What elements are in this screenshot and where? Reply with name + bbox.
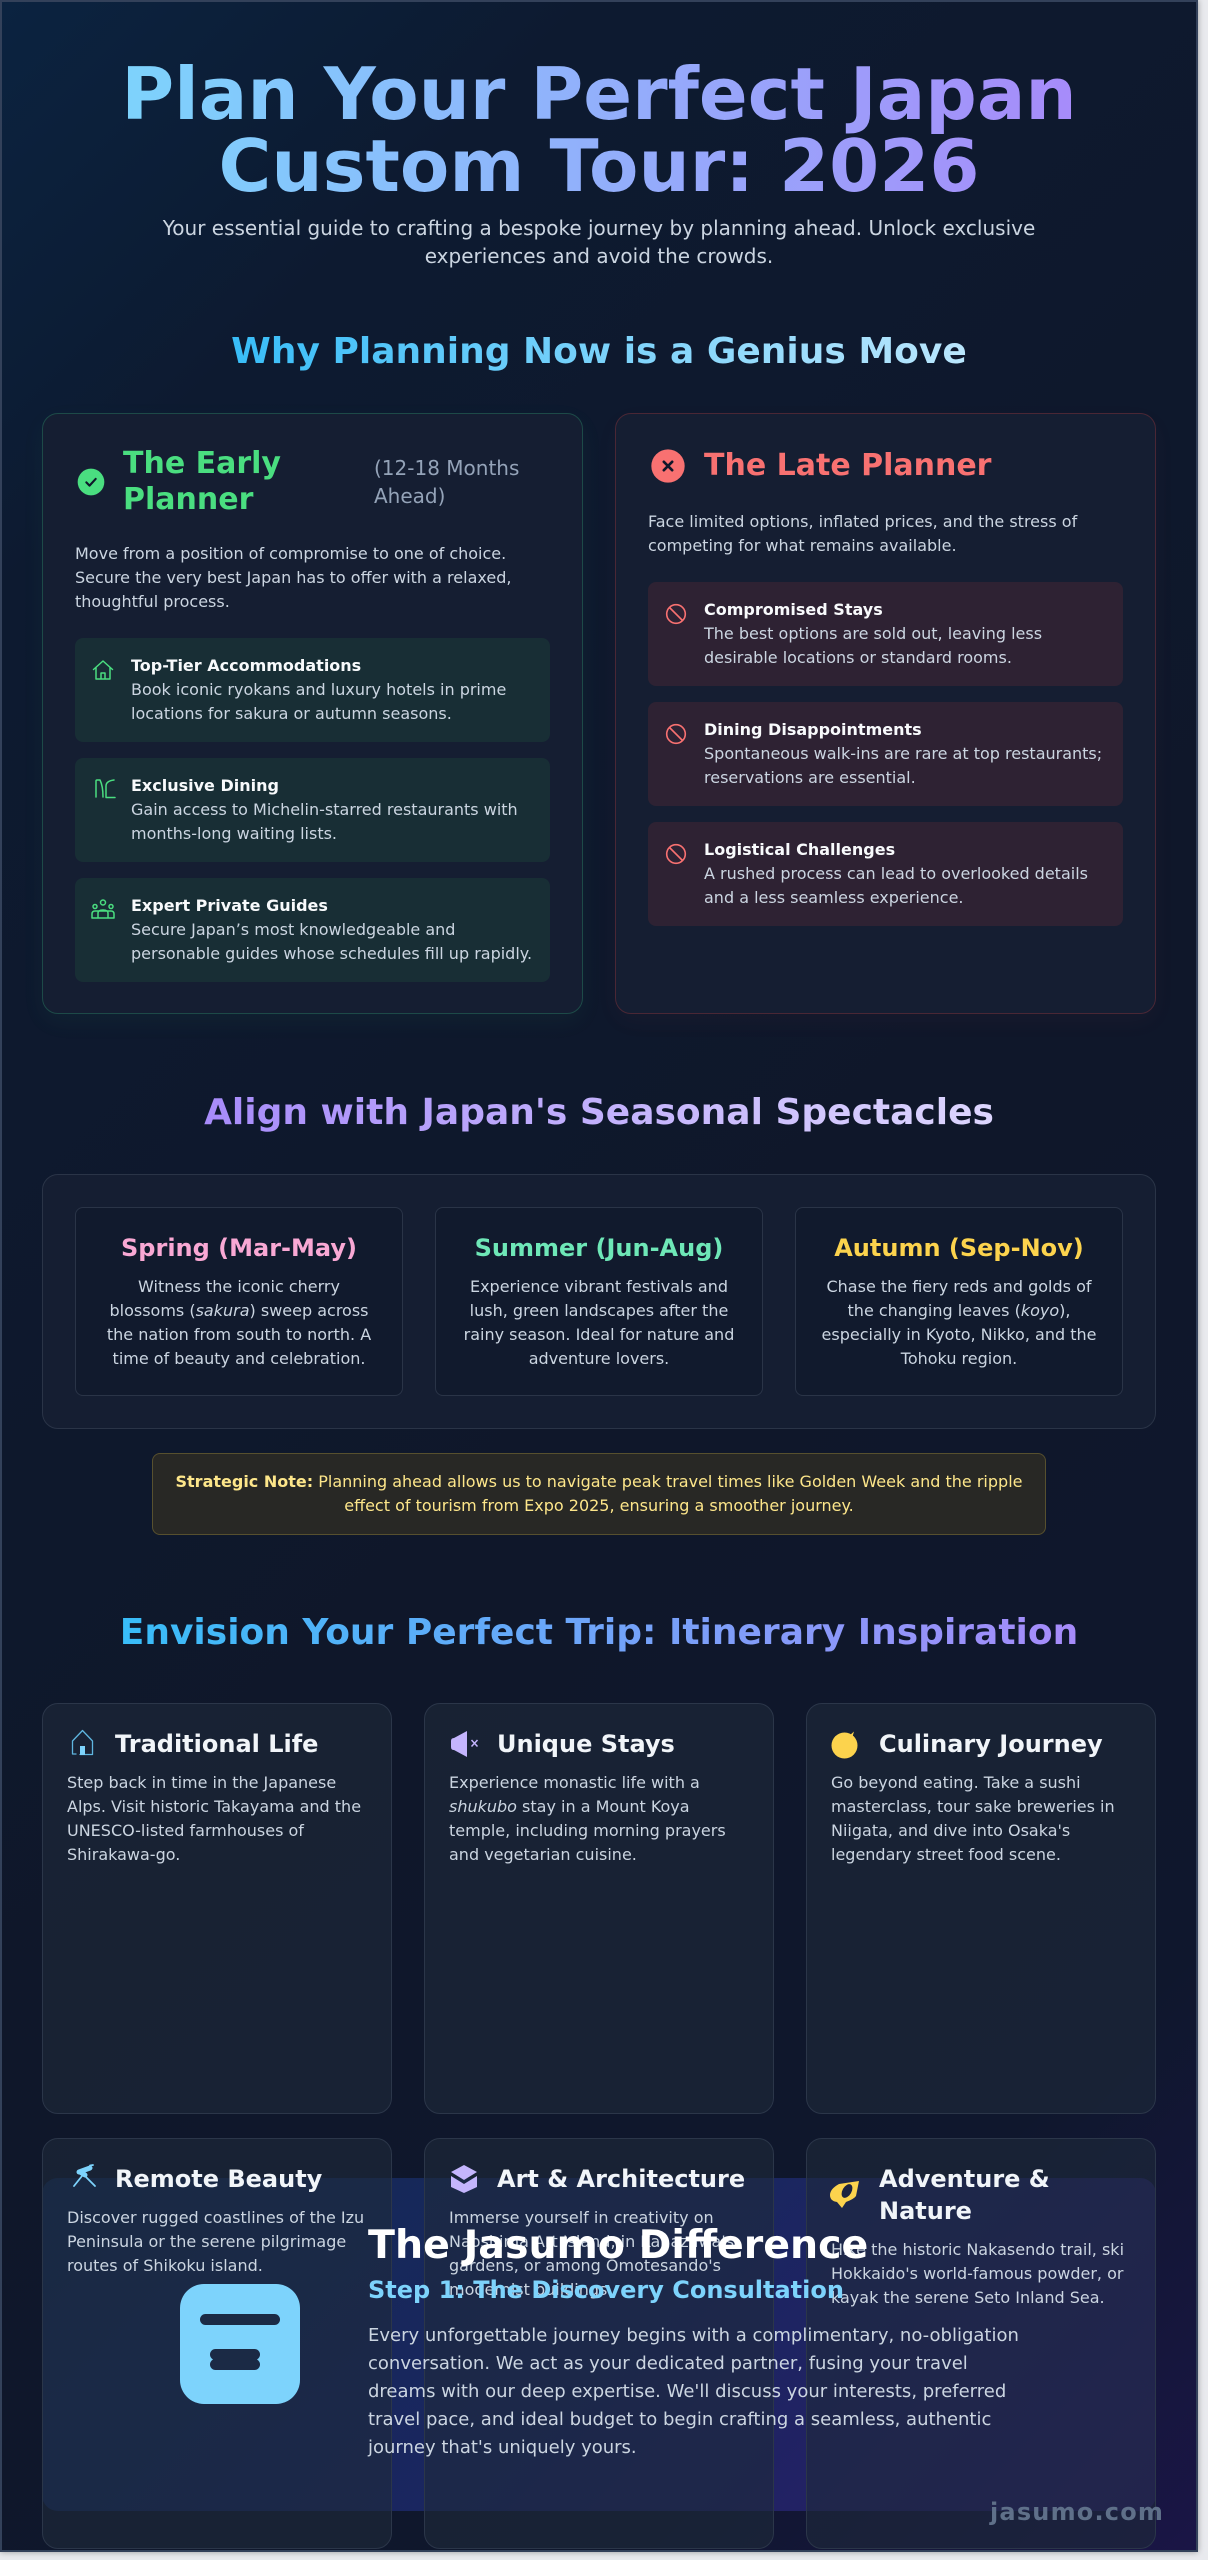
drawback text — [704, 744, 1102, 787]
text: step description: journey that's uniquely yours. — [368, 2437, 637, 2458]
card: art and architecture — [424, 2138, 774, 2549]
card text: Hokkaido's world-famous powder, or — [831, 2264, 1123, 2283]
card title: Adventure & — [879, 2165, 1050, 2193]
card text: Peninsula or the serene pilgrimage — [67, 2232, 346, 2251]
benefit title: Top-Tier Accommodations — [131, 656, 361, 675]
panel: Jasumo difference backdrop — [42, 2178, 1156, 2511]
season text: Chase the fiery reds and golds of — [826, 1277, 1092, 1296]
drawback text: desirable locations or standard rooms. — [704, 648, 1012, 667]
text: late planner summary: competing for what remains available. — [648, 536, 957, 555]
season text: adventure lovers. — [529, 1349, 669, 1368]
card text — [831, 2240, 1124, 2307]
card text: Experience monastic life with a — [449, 1773, 700, 1792]
drawback text: reservations are essential. — [704, 768, 916, 787]
card: culinary journey — [806, 1703, 1156, 2114]
card text: temple, including morning prayers — [449, 1821, 726, 1840]
callout: strategic note: effect of tourism from Expo 2025, ensuring a smoother journey. — [344, 1496, 854, 1515]
icon: traditional house — [72, 1730, 94, 1756]
benefit title: Exclusive Dining — [131, 776, 279, 795]
icon: fruit — [832, 1732, 858, 1758]
icon: group of guides — [91, 899, 115, 919]
benefit: dining — [75, 758, 550, 862]
card text — [67, 1773, 361, 1864]
heading: the early planner: Planner — [123, 482, 253, 517]
drawback text: The best options are sold out, leaving less — [704, 624, 1042, 643]
card text — [449, 2208, 734, 2299]
card title: Traditional Life — [115, 1730, 318, 1758]
benefit title: Expert Private Guides — [131, 896, 328, 915]
text: step description: dreams with our deep expertise. We'll discuss your interests, preferred — [368, 2381, 1006, 2402]
note: lead time — [374, 456, 519, 508]
text: early planner summary: Move from a position of compromise to one of choice. — [75, 544, 506, 563]
text: step description — [368, 2322, 1019, 2462]
card text: kayak the serene Seto Inland Sea. — [831, 2288, 1105, 2307]
benefit text — [131, 680, 506, 723]
season text: the nation from south to north. A — [107, 1325, 371, 1344]
season text: blossoms (sakura) sweep across — [109, 1301, 368, 1320]
benefit text: personable guides whose schedules fill up rapidly. — [131, 944, 532, 963]
benefit: guides — [75, 878, 550, 982]
season title: Spring (Mar-May) — [121, 1234, 357, 1262]
card text — [449, 1773, 726, 1864]
card text: Naoshima Art Island, in Kanazawa's — [449, 2232, 734, 2251]
card title: Culinary Journey — [879, 1730, 1103, 1758]
panel: Jasumo difference content — [180, 2222, 1019, 2458]
season text: Witness the iconic cherry — [138, 1277, 340, 1296]
heading: the Jasumo difference: The Jasumo Difference — [368, 2222, 868, 2268]
card text: Hike the historic Nakasendo trail, ski — [831, 2240, 1124, 2259]
icon: red cross — [651, 449, 685, 483]
icon: hiker — [73, 2164, 96, 2187]
card title — [879, 2165, 1050, 2225]
card title: Nature — [879, 2197, 972, 2225]
subheading: step 1: Step 1: The Discovery Consultation — [368, 2276, 844, 2304]
subtitle — [162, 216, 1035, 268]
callout: strategic note: Strategic Note: Planning ahead allows us to navigate peak travel times like Golden Week and the ripple — [176, 1472, 1022, 1491]
card title: Art & Architecture — [497, 2165, 745, 2193]
panel: the early planner — [42, 413, 583, 1014]
season text: Experience vibrant festivals and — [470, 1277, 728, 1296]
season: autumn — [795, 1207, 1123, 1396]
heading: the early planner — [123, 446, 281, 517]
season text — [464, 1277, 734, 1368]
footer: brand watermark: jasumo.com — [990, 2498, 1164, 2526]
title: Plan Your Perfect Japan — [121, 52, 1077, 136]
card text: Shirakawa-go. — [67, 1845, 180, 1864]
panel: the late planner — [615, 413, 1156, 1014]
drawback: stays — [648, 582, 1123, 686]
text: early planner summary: Secure the very best Japan has to offer with a relaxed, — [75, 568, 511, 587]
icon: green check — [78, 468, 104, 496]
card: adventure and nature — [806, 2138, 1156, 2549]
icon: adventure badge — [830, 2181, 859, 2208]
season text: time of beauty and celebration. — [113, 1349, 365, 1368]
icon: house — [92, 660, 114, 680]
icon: prohibited — [666, 844, 686, 864]
subtitle: experiences and avoid the crowds. — [425, 244, 773, 268]
card text: masterclass, tour sake breweries in — [831, 1797, 1115, 1816]
card text: shukubo stay in a Mount Koya — [449, 1797, 690, 1816]
drawback title: Logistical Challenges — [704, 840, 895, 859]
season text: lush, green landscapes after the — [470, 1301, 728, 1320]
drawback text — [704, 624, 1042, 667]
icon: prohibited — [666, 724, 686, 744]
text: step description: conversation. We act as your dedicated partner, fusing your travel — [368, 2353, 968, 2374]
season title: Summer (Jun-Aug) — [475, 1234, 723, 1262]
season: spring — [75, 1207, 403, 1396]
card text: legendary street food scene. — [831, 1845, 1061, 1864]
heading: the late planner: The Late Planner — [704, 448, 991, 483]
season text — [822, 1277, 1096, 1368]
card title: Unique Stays — [497, 1730, 675, 1758]
season text: rainy season. Ideal for nature and — [464, 1325, 734, 1344]
card text: and vegetarian cuisine. — [449, 1845, 637, 1864]
drawback text: A rushed process can lead to overlooked details — [704, 864, 1088, 883]
drawback: logistics — [648, 822, 1123, 926]
drawback title: Compromised Stays — [704, 600, 883, 619]
subtitle: Your essential guide to crafting a bespoke journey by planning ahead. Unlock exclusive — [163, 216, 1035, 240]
benefit: accommodations — [75, 638, 550, 742]
text: early planner summary: thoughtful process. — [75, 592, 230, 611]
drawback text: and a less seamless experience. — [704, 888, 964, 907]
card text: gardens, or among Omotesando's — [449, 2256, 721, 2275]
drawback title: Dining Disappointments — [704, 720, 922, 739]
benefit text: locations for sakura or autumn seasons. — [131, 704, 452, 723]
heading: itinerary inspiration: Envision Your Perfect Trip: Itinerary Inspiration — [120, 1612, 1078, 1653]
season text: Tohoku region. — [901, 1349, 1017, 1368]
text: step description: travel pace, and ideal budget to begin crafting a seamless, authentic — [368, 2409, 991, 2430]
season text — [107, 1277, 371, 1368]
card title: Remote Beauty — [115, 2165, 322, 2193]
title — [121, 52, 1077, 208]
heading: why planning now: Why Planning Now is a Genius Move — [231, 331, 967, 372]
heading: seasonal spectacles: Align with Japan's Seasonal Spectacles — [204, 1092, 994, 1133]
benefit text: Secure Japan’s most knowledgeable and — [131, 920, 455, 939]
card text: Immerse yourself in creativity on — [449, 2208, 714, 2227]
card: traditional life — [42, 1703, 392, 2114]
card text: Alps. Visit historic Takayama and the — [67, 1797, 361, 1816]
benefit text: Book iconic ryokans and luxury hotels in prime — [131, 680, 506, 699]
season text: especially in Kyoto, Nikko, and the — [822, 1325, 1096, 1344]
card text: Niigata, and dive into Osaka's — [831, 1821, 1070, 1840]
card text: Go beyond eating. Take a sushi — [831, 1773, 1081, 1792]
card text: Step back in time in the Japanese — [67, 1773, 336, 1792]
note: lead time: (12-18 Months — [374, 456, 519, 480]
icon: dining — [95, 779, 116, 798]
benefit text: Gain access to Michelin-starred restaurants with — [131, 800, 518, 819]
callout: strategic note — [152, 1453, 1046, 1535]
card: unique stays — [424, 1703, 774, 2114]
icon: muted speaker — [451, 1731, 478, 1757]
season text: the changing leaves (koyo), — [848, 1301, 1070, 1320]
title: Custom Tour: 2026 — [219, 124, 979, 208]
text: late planner summary — [648, 512, 1078, 555]
drawback text: Spontaneous walk-ins are rare at top restaurants; — [704, 744, 1102, 763]
icon: prohibited — [666, 604, 686, 624]
card: remote beauty — [42, 2138, 392, 2549]
season: summer — [435, 1207, 763, 1396]
card text: modernist buildings. — [449, 2280, 612, 2299]
benefit text — [131, 800, 518, 843]
icon: consultation document — [180, 2284, 300, 2404]
text: step description: Every unforgettable journey begins with a complimentary, no-obligation — [368, 2325, 1019, 2346]
drawback text — [704, 864, 1088, 907]
card text: UNESCO-listed farmhouses of — [67, 1821, 304, 1840]
note: lead time: Ahead) — [374, 484, 445, 508]
text: late planner summary: Face limited options, inflated prices, and the stress of — [648, 512, 1077, 531]
drawback: dining — [648, 702, 1123, 806]
heading: the early planner: The Early — [123, 446, 281, 481]
benefit text — [131, 920, 532, 963]
card text: Discover rugged coastlines of the Izu — [67, 2208, 364, 2227]
card text: routes of Shikoku island. — [67, 2256, 263, 2275]
card text — [831, 1773, 1115, 1864]
card text — [67, 2208, 364, 2275]
text: early planner summary — [75, 544, 511, 611]
season title: Autumn (Sep-Nov) — [834, 1234, 1084, 1262]
benefit text: months-long waiting lists. — [131, 824, 337, 843]
panel: seasons — [42, 1174, 1156, 1429]
icon: cube — [451, 2165, 477, 2193]
